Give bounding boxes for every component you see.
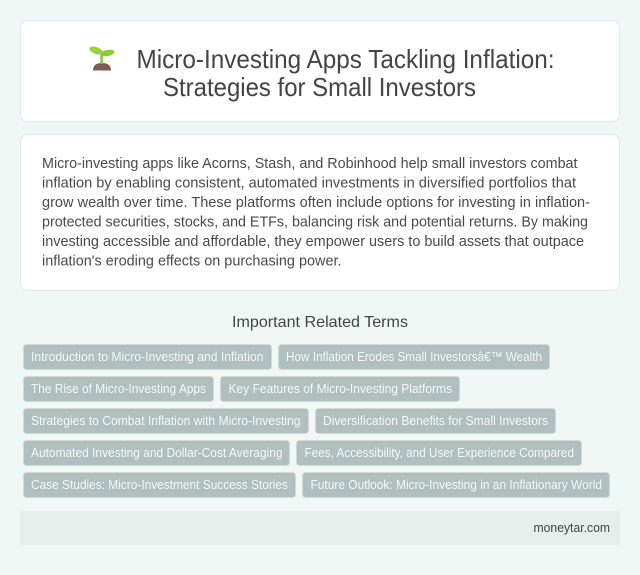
tag: introduction [24,344,272,370]
tag: fees [296,440,582,466]
description text: protected securities, stocks, and ETFs, balancing risk and potential returns. By making [42,214,588,230]
footer source text: moneytar.com [534,520,610,535]
title text: Micro-Investing Apps Tackling Inflation: [136,44,554,74]
footer bar [20,511,620,545]
description text [42,155,590,270]
tag: automated investing: Automated Investing and Dollar-Cost Averaging [31,445,282,460]
description text: investing accessible and affordable, they empower users to build assets that outpace [42,233,584,250]
description text: Micro-investing apps like Acorns, Stash, and Robinhood help small investors combat [42,155,578,172]
tag: key features: Key Features of Micro-Investing Platforms [228,381,452,396]
description text: grow wealth over time. These platforms often include options for investing in inflation- [42,194,590,211]
icon: sprout [88,45,115,70]
tag: case studies [24,472,296,498]
tag: future outlook: Future Outlook: Micro-Investing in an Inflationary World [310,477,602,492]
title text [136,44,554,102]
tag: rise of apps [24,376,214,402]
panel: description card [20,134,620,290]
tag: inflation erodes wealth: How Inflation Erodes Small Investorsâ€™ Wealth [286,349,542,364]
tag: case studies: Case Studies: Micro-Investment Success Stories [31,477,288,492]
heading: related terms: Important Related Terms [232,314,408,331]
tag: key features [220,376,460,402]
tag: strategies: Strategies to Combat Inflation with Micro-Investing [31,413,300,428]
description text: inflation's eroding effects on purchasing power. [42,252,342,270]
panel: related term tags [24,344,610,498]
tag: diversification [316,408,556,434]
tag: introduction: Introduction to Micro-Investing and Inflation [31,349,264,364]
tag: automated investing [24,440,290,466]
tag: fees: Fees, Accessibility, and User Experience Compared [304,445,574,460]
tag: future outlook [302,472,610,498]
panel: title card [20,20,620,122]
tag: rise of apps: The Rise of Micro-Investing Apps [31,381,206,396]
description text: inflation by enabling consistent, automated investments in diversified portfolios that [42,174,577,192]
title text: Strategies for Small Investors [163,72,476,102]
tag: strategies [24,408,308,434]
tag: diversification: Diversification Benefits for Small Investors [323,413,548,428]
tag: inflation erodes wealth [278,344,550,370]
